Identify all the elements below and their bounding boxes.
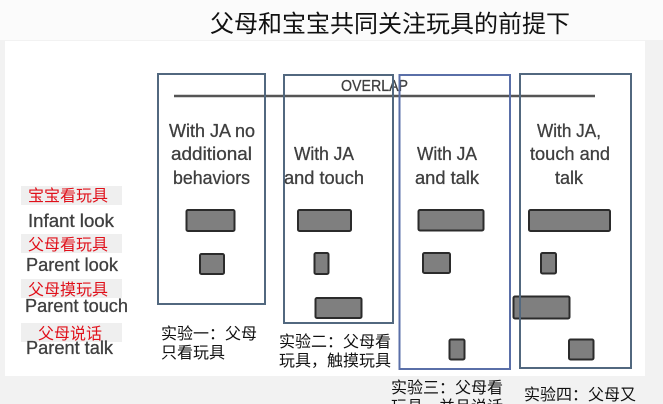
label: parent talk: 父母说话 — [38, 325, 102, 343]
label: parent look — [21, 234, 122, 275]
label: infant look: 宝宝看玩具 — [28, 187, 108, 205]
panel: experiment 1: With JA no — [169, 121, 255, 141]
title: 父母和宝宝共同关注玩具的前提下 — [210, 11, 570, 38]
label: parent look: 父母看玩具 — [28, 236, 108, 254]
caption: experiment 1: 实验一：父母 — [161, 326, 257, 343]
panel: experiment 3: and talk — [415, 168, 480, 188]
panel: experiment 4: With JA, — [537, 121, 601, 141]
overlap axis: OVERLAP — [341, 78, 408, 95]
label: infant look — [21, 186, 122, 231]
panel: experiment 4: talk — [555, 168, 584, 188]
label: parent look: Parent look — [26, 255, 119, 275]
panel: experiment 2: and touch — [284, 168, 364, 188]
label: infant look: Infant look — [28, 211, 115, 231]
row labels — [21, 186, 128, 358]
label: parent touch: 父母摸玩具 — [28, 281, 108, 299]
panel: experiment 1: behaviors — [173, 168, 250, 188]
caption: experiment 2: 实验二：父母看 — [279, 334, 391, 351]
panel: experiment 3: With JA — [417, 144, 477, 164]
label: parent talk — [21, 323, 122, 358]
caption: experiment 2: 玩具，触摸玩具 — [279, 352, 391, 370]
label: parent touch: Parent touch — [25, 296, 128, 316]
panel: experiment 2: With JA — [294, 144, 354, 164]
panel: experiment 4 — [514, 74, 631, 368]
caption: experiment 3: 实验三：父母看 — [391, 380, 503, 397]
label: parent talk: Parent talk — [26, 338, 114, 358]
panel: experiment 1 — [158, 74, 265, 304]
caption: experiment 1: 只看玩具 — [161, 344, 225, 362]
label: parent touch — [21, 279, 128, 316]
panel: experiment 3 — [400, 75, 510, 369]
panel: experiment 1: additional — [171, 144, 252, 164]
caption: experiment 4: 实验四：父母又 — [524, 386, 636, 404]
panel: experiment 2 — [284, 75, 393, 323]
panel: experiment 4: touch and — [530, 144, 610, 164]
